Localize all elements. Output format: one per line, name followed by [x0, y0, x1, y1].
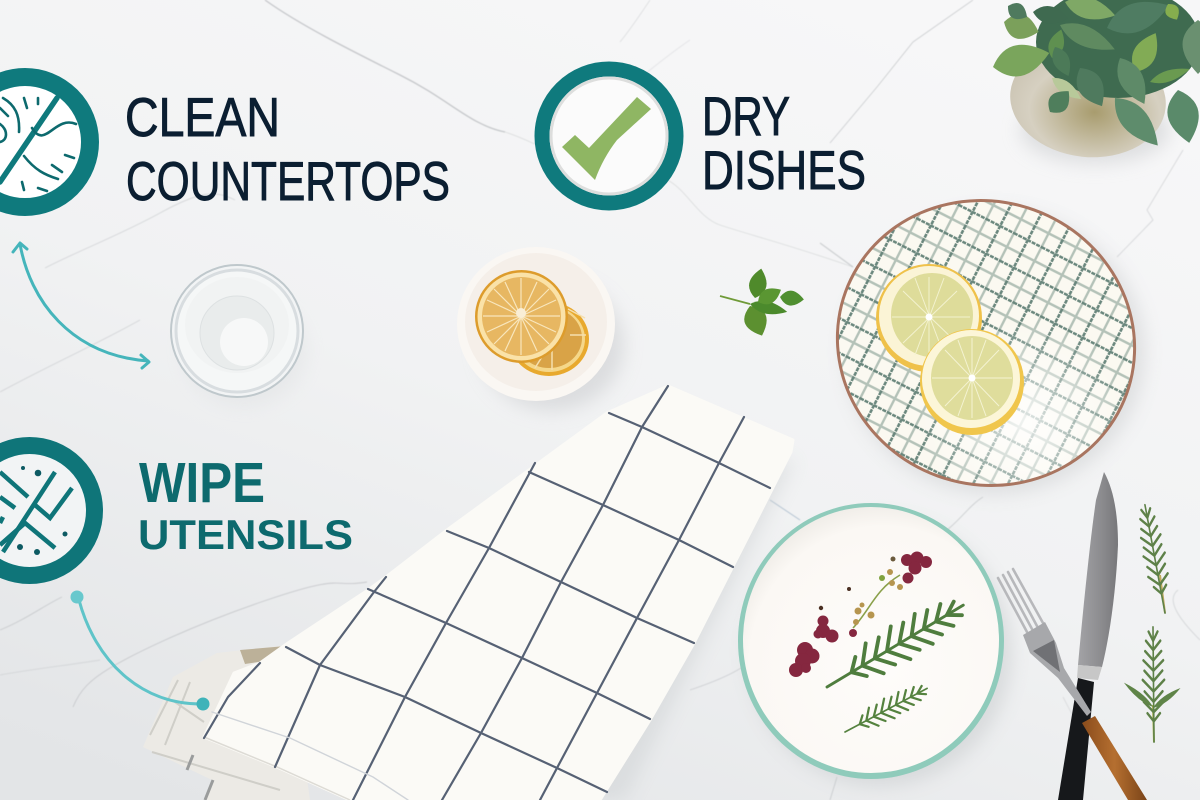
teal-rimmed bowl with herbs [738, 503, 1012, 786]
heading: wipe utensils: UTENSILS [138, 511, 353, 558]
underlying folded layer [143, 645, 310, 800]
rosemary sprig, small [840, 678, 932, 742]
icon: wipe utensils badge [0, 446, 94, 576]
heading: clean countertops: CLEAN [125, 86, 280, 148]
heading: clean countertops [125, 86, 450, 212]
foliage [989, 0, 1200, 154]
dried orange slice, rear [509, 302, 589, 376]
towel grid lines [204, 386, 770, 800]
heading: clean countertops: COUNTERTOPS [126, 150, 450, 212]
heading: wipe utensils [138, 451, 353, 558]
rosemary sprig, upper right [1134, 503, 1176, 615]
bowl with dried orange slices [457, 247, 624, 411]
heading: wipe utensils: WIPE [139, 451, 265, 515]
heading: dry dishes: DISHES [702, 139, 866, 201]
rosemary sprig, large [817, 589, 973, 703]
table knife [1058, 472, 1118, 800]
pot [1004, 35, 1172, 165]
flowering herb stem [819, 556, 903, 628]
lemon slice, upper [876, 264, 982, 372]
heading: dry dishes: DRY [702, 85, 790, 147]
checked plate with lemon slices [795, 157, 1177, 529]
table fork [998, 569, 1147, 800]
heading: dry dishes [702, 85, 866, 201]
folded checked towel [143, 386, 795, 800]
icon: dry dishes check badge [542, 69, 676, 203]
glass of water [171, 265, 307, 406]
connector: dot-ended curve from badge to towel [70, 590, 210, 710]
dried orange slice, front [475, 270, 568, 363]
lemon slice, lower [920, 329, 1024, 435]
fork wooden handle [1082, 716, 1147, 800]
mint sprig [720, 267, 805, 340]
dried berries [789, 552, 932, 677]
plant in speckled pot [989, 0, 1200, 165]
arrow: double-headed curve from badge to glass [13, 243, 149, 368]
icon: clean countertops badge [0, 77, 90, 207]
rosemary sprig, lower right [1122, 627, 1182, 742]
top towel layer [204, 386, 793, 800]
